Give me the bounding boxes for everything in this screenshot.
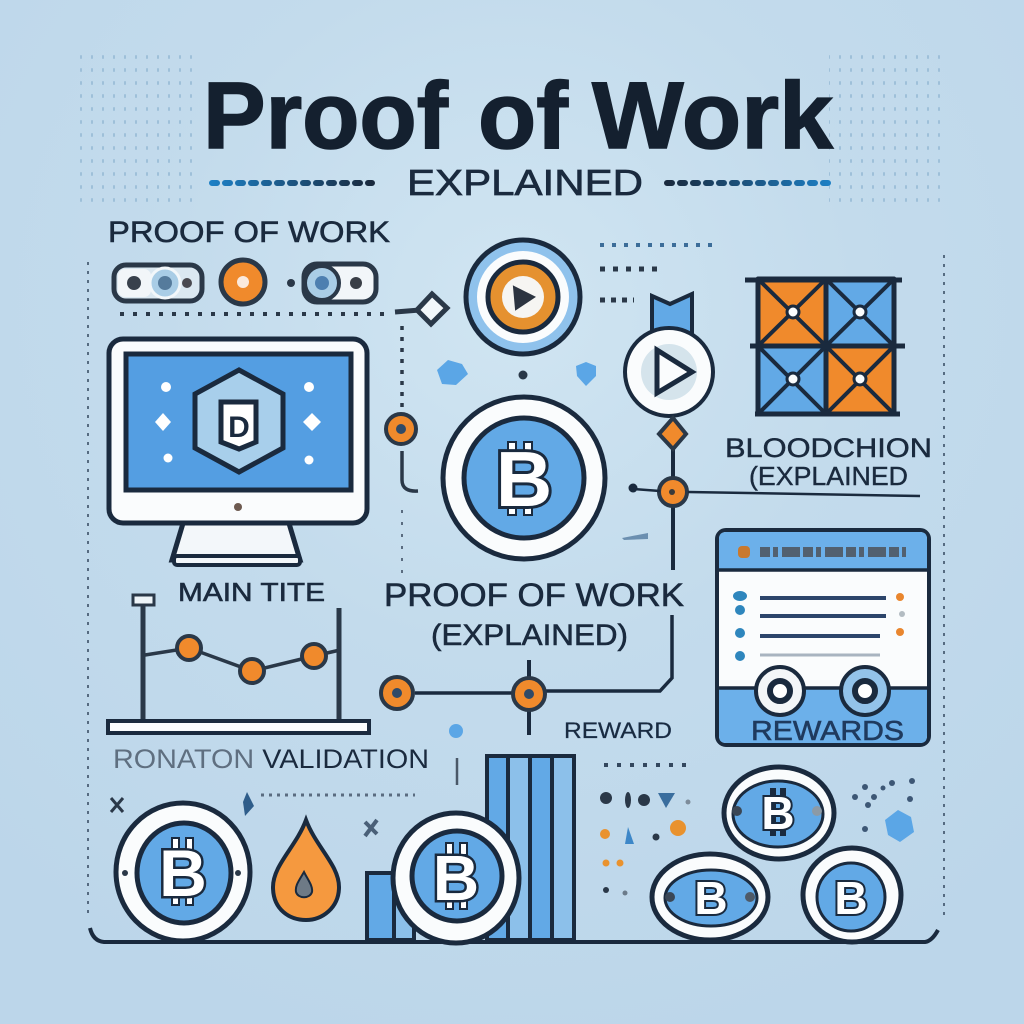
icon: computer monitor: D (228, 411, 250, 444)
label: proof of work explained: PROOF OF WORK (384, 577, 684, 613)
panel: rewards card (717, 530, 929, 746)
icon: coin centre bottom: B (433, 842, 479, 914)
icon: coin lower right: B (834, 872, 868, 924)
marker arrow (456, 758, 458, 785)
icon: coin lower right (803, 848, 901, 942)
icon: coin left (116, 803, 250, 941)
connector: vertical and horizontal line with nodes (415, 418, 920, 735)
icon: central bitcoin coin (443, 397, 605, 559)
heading: proof of work: PROOF OF WORK (108, 216, 390, 249)
title: Proof (203, 63, 448, 169)
label: explained: (EXPLAINED (749, 461, 908, 491)
subtitle: EXPLAINED (407, 162, 643, 203)
panel: rewards card: REWARDS (751, 715, 904, 746)
label: main title: MAIN TITE (178, 577, 325, 607)
frame baseline (90, 928, 938, 942)
icon: coin upper right (724, 767, 834, 859)
panel frame (88, 255, 944, 915)
icon: computer monitor (109, 339, 367, 565)
icon: orange drop (273, 820, 339, 920)
label: proof of work explained: (EXPLAINED) (431, 619, 628, 652)
label: bloodchion: BLOODCHION (725, 433, 932, 463)
icon: coin left: B (159, 836, 207, 910)
timeline nodes (381, 677, 545, 738)
label: reward: REWARD (564, 718, 672, 743)
scattered marks bottom (111, 765, 915, 896)
connector node left (386, 414, 418, 580)
decorative dot patches (80, 55, 944, 203)
title: of (478, 63, 568, 169)
icon: coin lower middle: B (694, 872, 728, 924)
icon: play badge with ribbon (625, 294, 713, 416)
chart: line chart on stand (108, 595, 369, 733)
icon: central bitcoin coin: B (496, 435, 552, 523)
title (203, 63, 833, 169)
icon: blockchain grid (745, 279, 905, 414)
subtitle (210, 162, 830, 203)
icon: coin upper right: B (761, 787, 795, 839)
dotted connector with diamond tag (120, 294, 447, 408)
icon: top medallion (466, 240, 580, 354)
chart: bars (367, 756, 574, 940)
icon: coin lower middle (652, 854, 768, 940)
icon row: nodes (114, 260, 376, 304)
small decorative marks (437, 245, 712, 540)
title: Work (592, 63, 833, 169)
icon: coin centre bottom (393, 813, 519, 943)
label: proof of work explained (384, 577, 684, 652)
label: ronaton validation: RONATON VALIDATION (113, 744, 429, 774)
